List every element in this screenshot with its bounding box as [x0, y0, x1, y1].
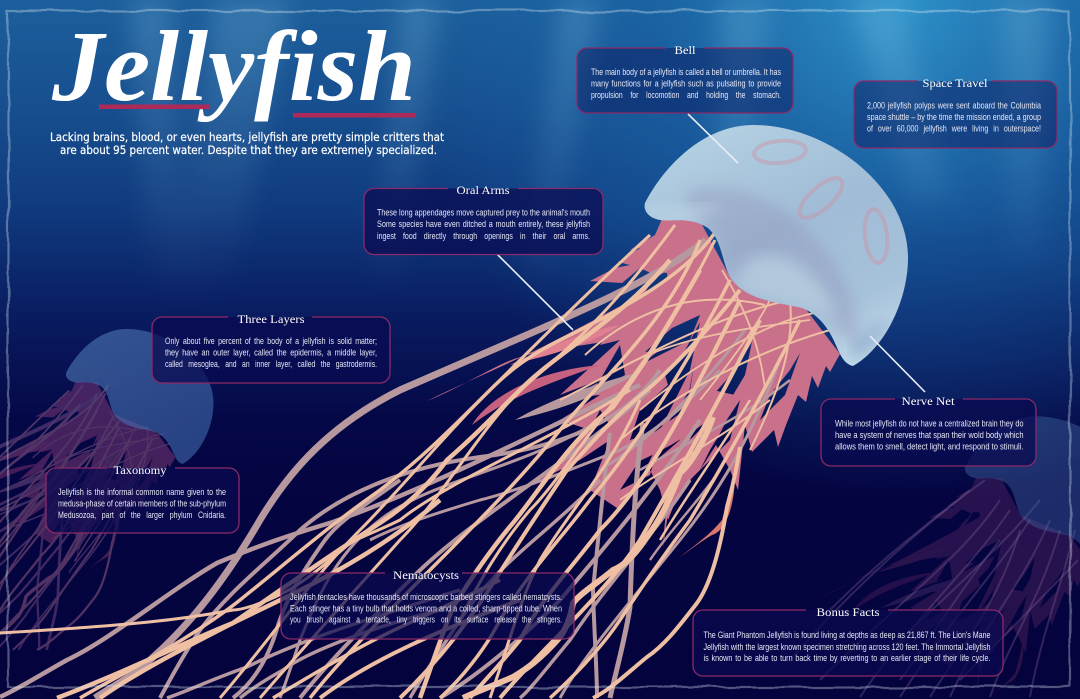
panel: bonus facts: Bonus Facts	[816, 605, 880, 619]
panel: bell: The main body of a jellyfish is called a bell or umbrella. It has	[591, 67, 781, 78]
panel: bell: Bell	[674, 43, 696, 57]
panel: taxonomy: medusa-phase of certain members of the sub-phylum	[58, 498, 226, 510]
bell	[645, 125, 908, 366]
tentacles and oral arms	[0, 219, 840, 698]
background jellyfish: left	[0, 329, 213, 650]
panel: bonus facts: Jellyfish with the largest known specimen stretching across 120 feet. The Immortal Jellyfish	[704, 642, 990, 653]
panel: three layers: they have an outer layer, called the epidermis, a middle layer,	[165, 348, 377, 358]
panel: three layers: called mesoglea, and an inner layer, called the gastrodermis.	[165, 359, 377, 370]
pointer: bell	[688, 114, 738, 163]
panel: nematocysts	[281, 568, 574, 639]
title: Jellyfish	[51, 10, 416, 122]
panel: taxonomy: Jellyfish is the informal common name given to the	[58, 487, 226, 498]
panel: bonus facts: is known to be able to turn back time by reverting to an earlier stage of their life cycle.	[704, 653, 990, 664]
subtitle	[50, 130, 444, 157]
panel: bell	[577, 43, 793, 113]
panel: nerve net: While most jellyfish do not have a centralized brain they do	[835, 418, 1024, 430]
panel: space travel: Space Travel	[922, 76, 988, 90]
panel: oral arms: ingest food directly through openings in their oral arms.	[377, 231, 590, 242]
panel: three layers	[152, 312, 390, 383]
panel: taxonomy	[46, 463, 239, 533]
panel: three layers: Three Layers	[238, 312, 305, 326]
background jellyfish: right	[790, 416, 1080, 697]
panel: bell: propulsion for locomotion and holding the stomach.	[591, 90, 781, 101]
main jellyfish	[0, 125, 908, 698]
subtitle: are about 95 percent water. Despite that they are extremely specialized.	[60, 143, 437, 157]
panel: bonus facts: The Giant Phantom Jellyfish is found living at depths as deep as 21,867 ft. The Lion's Mane	[704, 630, 990, 641]
panel: bonus facts	[693, 605, 1003, 676]
panel: nematocysts: Jellyfish tentacles have thousands of microscopic barbed stingers called nematcysts.	[290, 592, 562, 603]
panel: nematocysts: Nematocysts	[393, 568, 459, 582]
panel: oral arms	[364, 183, 603, 254]
panel: taxonomy: Medusozoa, part of the larger phylum Cnidaria.	[58, 510, 226, 521]
panel: space travel	[854, 76, 1057, 148]
panel: nematocysts: you brush against a tentacle, tiny triggers on its surface release the stingers.	[290, 614, 562, 626]
pointer: nerve net	[870, 336, 925, 392]
pointer: oral arms	[497, 254, 573, 330]
panel: nerve net: have a system of nerves that span their wold body which	[835, 430, 1024, 441]
title underlines	[99, 104, 416, 118]
panel: nerve net: Nerve Net	[902, 394, 955, 408]
panel: bell: many functions for a jellyfish such as pulsating to provide	[591, 78, 781, 90]
panel: taxonomy: Taxonomy	[114, 463, 166, 477]
panel: nerve net	[821, 394, 1036, 466]
panel: nerve net: allows them to smell, detect light, and respond to stimuli.	[835, 442, 1024, 452]
panel: nematocysts: Each stinger has a tiny bulb that holds venom and a coiled, sharp-tipped tube. When	[290, 604, 562, 614]
panel: three layers: Only about five percent of the body of a jellyfish is solid matter;	[165, 336, 377, 347]
panel: oral arms: Oral Arms	[456, 183, 510, 197]
panel: oral arms: Some species have even ditched a mouth entirely, these jellyfish	[377, 219, 590, 230]
subtitle: Lacking brains, blood, or even hearts, jellyfish are pretty simple critters that	[50, 130, 444, 144]
panel: oral arms: These long appendages move captured prey to the animal's mouth	[377, 208, 590, 218]
